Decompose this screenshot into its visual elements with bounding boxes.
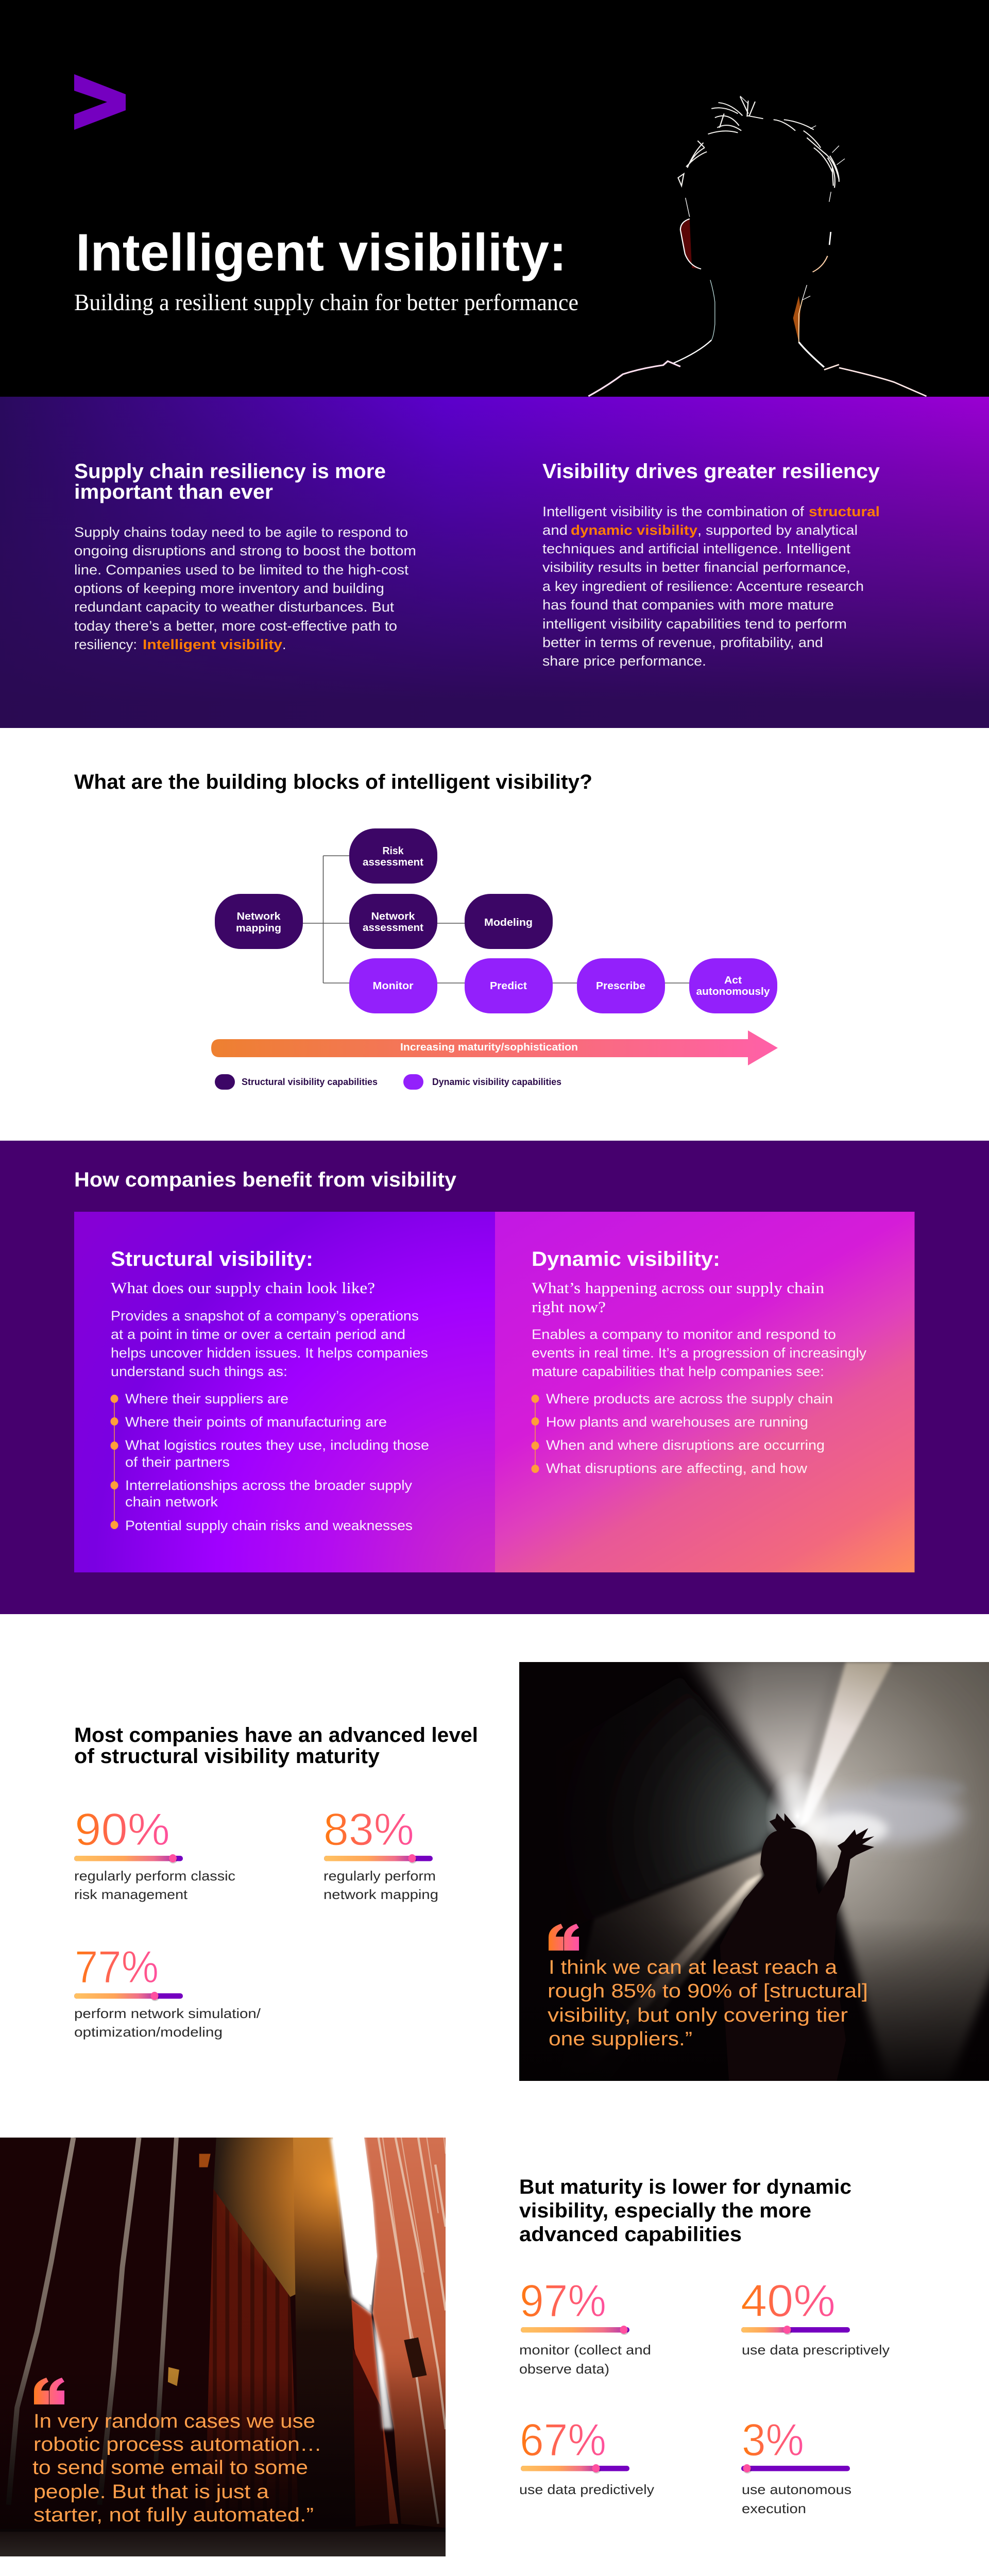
callout: quote about structural visibility [548, 1924, 868, 2050]
stat: 77%: 77% [75, 1941, 159, 1992]
stat: 90%: risk management [74, 1887, 188, 1902]
node: network assessment: assessment [363, 922, 423, 934]
panel: dynamic maturity stats [0, 2070, 890, 2556]
arrow: increasing maturity: Increasing maturity/sophistication [400, 1042, 578, 1053]
bullet list: structural: Where their points of manufacturing are [125, 1414, 387, 1430]
panel: building blocks [74, 771, 778, 1090]
stat: 97% [519, 2275, 651, 2377]
text block: visibility body: , supported by analytical [697, 522, 858, 538]
subtitle: Building a resilient supply chain for better performance [74, 289, 578, 315]
bullet list: dynamic: How plants and warehouses are running [546, 1414, 808, 1430]
stat: 90%: regularly perform classic [74, 1868, 235, 1884]
text block: visibility body: Intelligent visibility is the combination of [542, 504, 805, 519]
text block: visibility body: visibility results in better financial performance, [542, 560, 850, 575]
node: monitor [349, 958, 437, 1013]
stat: 40%: 40% [741, 2275, 835, 2326]
heading: how companies benefit: How companies benefit from visibility [74, 1168, 457, 1191]
arrow: increasing maturity [211, 1030, 778, 1065]
title: Intelligent visibility: [76, 223, 567, 282]
heading: structural maturity: of structural visibility maturity [74, 1745, 380, 1768]
stat: 83% [323, 1804, 438, 1902]
text block: dynamic description [532, 1327, 867, 1379]
bullet list: structural: Potential supply chain risks and weaknesses [125, 1518, 413, 1533]
bullet list: structural: chain network [125, 1494, 218, 1510]
text block: supply chain body: Intelligent visibility [143, 637, 282, 652]
stat: 77%: optimization/modeling [74, 2024, 223, 2040]
node: prescribe: Prescribe [596, 980, 645, 992]
legend: Structural visibility capabilities [242, 1077, 378, 1087]
text block: dynamic description: Enables a company to monitor and respond to [532, 1327, 836, 1342]
bullet list: structural: Where their suppliers are [125, 1391, 288, 1406]
stat: 3%: 3% [742, 2414, 804, 2465]
icon: Accenture chevron logo [74, 74, 126, 130]
text block: supply chain body: . [282, 637, 286, 652]
panel: structural visibility: What does our supply chain look like? [111, 1279, 375, 1297]
stat: 3% [741, 2414, 851, 2516]
heading: building blocks: What are the building blocks of intelligent visibility? [74, 771, 592, 793]
node: network mapping [215, 894, 303, 949]
heading: structural maturity: Most companies have an advanced level [74, 1724, 478, 1747]
callout: quote about robotic process automation: to send some email to some [32, 2457, 308, 2479]
heading: structural maturity [74, 1724, 478, 1768]
panel: structural maturity stats [74, 1651, 989, 2094]
text block: structural description: helps uncover hidden issues. It helps companies [111, 1345, 428, 1361]
photo: person reaching into beam of light [519, 1662, 989, 2081]
stat: 67% [519, 2414, 654, 2497]
bullet list: structural: of their partners [125, 1454, 230, 1470]
text block: visibility body [542, 504, 880, 669]
text block: supply chain body: options of keeping more inventory and building [74, 581, 384, 596]
panel: structural visibility: Structural visibility: [111, 1248, 313, 1270]
panel: how companies benefit [0, 1141, 989, 1614]
bullet list: dynamic: Where products are across the supply chain [546, 1391, 833, 1406]
node: act autonomously: Act [724, 975, 742, 986]
node: act autonomously [689, 958, 777, 1013]
text block: visibility body: techniques and artificial intelligence. Intelligent [542, 541, 851, 556]
flow connector lines [303, 856, 689, 983]
callout: quote about structural visibility: I think we can at least reach a [549, 1957, 838, 1978]
text block: visibility body: better in terms of revenue, profitability, and [542, 635, 823, 650]
stat: 40% [741, 2275, 890, 2358]
callout: quote about robotic process automation: people. But that is just a [33, 2481, 269, 2503]
stat: 67%: use data predictively [519, 2482, 654, 2497]
text block: dynamic description: events in real time. It’s a progression of increasingly [532, 1345, 867, 1361]
text block: structural description: understand such things as: [111, 1364, 287, 1379]
text block: supply chain body: line. Companies used to be limited to the high-cost [74, 562, 409, 578]
text block: structural description: at a point in time or over a certain period and [111, 1327, 405, 1342]
heading: visibility drives resiliency: Visibility drives greater resiliency [542, 460, 880, 483]
callout: quote about robotic process automation: robotic process automation… [33, 2434, 322, 2455]
stat: 90%: 90% [75, 1804, 170, 1855]
stat: 97%: 97% [520, 2275, 606, 2326]
heading: dynamic maturity: But maturity is lower for dynamic [519, 2176, 851, 2198]
stat: 67%: 67% [520, 2414, 606, 2465]
callout: quote about structural visibility: rough 85% to 90% of [structural] [548, 1980, 868, 2002]
text block: visibility body: dynamic visibility [571, 522, 697, 538]
stat: 3%: use autonomous [742, 2482, 851, 2497]
icon: quote mark [34, 2378, 64, 2404]
legend: Dynamic visibility capabilities [432, 1077, 561, 1087]
node: network mapping: mapping [236, 923, 281, 934]
photo: shipping containers toward bright sky [0, 2138, 446, 2556]
legend [215, 1074, 561, 1090]
stat: 83%: network mapping [323, 1887, 438, 1902]
stat: 77% [74, 1941, 261, 2040]
callout: quote about structural visibility: one suppliers.” [549, 2028, 692, 2050]
panel: dynamic visibility: Dynamic visibility: [532, 1248, 720, 1270]
node: risk assessment: assessment [363, 857, 423, 868]
callout: quote about structural visibility: visibility, but only covering tier [548, 2005, 848, 2026]
bullet list: dynamic: When and where disruptions are occurring [546, 1437, 825, 1453]
text block: supply chain body [74, 524, 416, 652]
node: predict [465, 958, 553, 1013]
bullet list: structural [110, 1391, 429, 1533]
heading: dynamic maturity [519, 2176, 851, 2246]
stat: 97%: monitor (collect and [519, 2342, 651, 2358]
stat: 97%: observe data) [519, 2361, 609, 2377]
text block: supply chain body: Supply chains today need to be agile to respond to [74, 524, 408, 540]
stat: 83%: 83% [323, 1804, 414, 1855]
text block: structural description: Provides a snapshot of a company’s operations [111, 1308, 419, 1324]
callout: quote about robotic process automation: starter, not fully automated.” [33, 2504, 314, 2526]
node: predict: Predict [490, 980, 527, 992]
panel: dynamic visibility: What’s happening across our supply chain [532, 1279, 825, 1297]
bullet list: structural: What logistics routes they use, including those [125, 1437, 429, 1453]
text block: supply chain body: today there’s a better, more cost-effective path to [74, 618, 397, 634]
icon: quote mark [549, 1924, 579, 1951]
text block: supply chain body: redundant capacity to weather disturbances. But [74, 599, 395, 615]
callout: quote about robotic process automation: In very random cases we use [33, 2411, 315, 2432]
node: network mapping: Network [237, 911, 281, 922]
panel: dynamic visibility [495, 1212, 915, 1572]
panel: dynamic visibility: right now? [532, 1298, 606, 1316]
panel: structural visibility [74, 1212, 495, 1572]
stat: 40%: use data prescriptively [742, 2342, 890, 2358]
text block: visibility body: structural [809, 504, 880, 519]
node: network assessment: Network [371, 911, 415, 922]
text block: visibility body: intelligent visibility capabilities tend to perform [542, 616, 847, 632]
node: risk assessment: Risk [382, 845, 404, 857]
stat: 83%: regularly perform [323, 1868, 436, 1884]
node: modeling: Modeling [484, 917, 533, 928]
heading: supply chain resiliency [74, 460, 386, 503]
node: network assessment [349, 894, 437, 949]
text block: structural description [111, 1308, 428, 1379]
silhouette photo with rim light [588, 96, 927, 396]
text block: dynamic description: mature capabilities that help companies see: [532, 1364, 824, 1379]
heading: supply chain resiliency: Supply chain resiliency is more [74, 460, 386, 483]
text block: visibility body: has found that companies with more mature [542, 597, 834, 613]
stat: 90% [74, 1804, 235, 1902]
text block: visibility body: share price performance. [542, 653, 706, 669]
bullet list: dynamic [532, 1391, 833, 1476]
heading: supply chain resiliency: important than ever [74, 481, 273, 503]
node: prescribe [577, 958, 665, 1013]
node: act autonomously: autonomously [696, 986, 770, 997]
bullet list: dynamic: What disruptions are affecting, and how [546, 1461, 808, 1476]
stat: 77%: perform network simulation/ [74, 2006, 261, 2021]
node: risk assessment [349, 828, 437, 884]
heading: dynamic maturity: visibility, especially the more [519, 2199, 811, 2222]
hero banner [0, 0, 989, 397]
text block: visibility body: a key ingredient of resilience: Accenture research [542, 579, 864, 594]
panel: resiliency intro [0, 397, 989, 728]
text block: visibility body: and [542, 522, 568, 538]
stat: 3%: execution [742, 2501, 806, 2516]
callout: quote about robotic process automation [32, 2378, 322, 2526]
node: monitor: Monitor [373, 980, 414, 992]
node: modeling [465, 894, 553, 949]
heading: dynamic maturity: advanced capabilities [519, 2223, 742, 2246]
text block: supply chain body: ongoing disruptions and strong to boost the bottom [74, 543, 416, 558]
bullet list: structural: Interrelationships across the broader supply [125, 1478, 413, 1493]
text block: supply chain body: resiliency: [74, 637, 137, 652]
